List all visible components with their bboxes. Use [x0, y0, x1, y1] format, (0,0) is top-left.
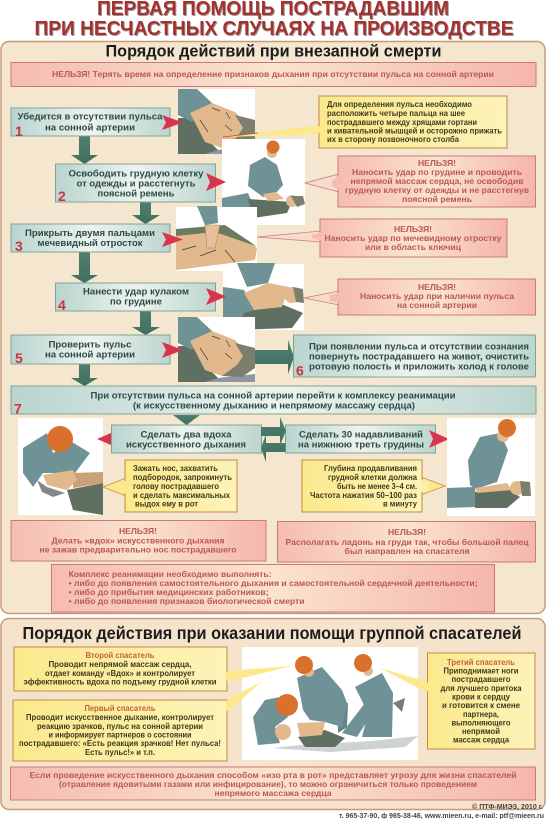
pointer: step 3	[162, 232, 183, 247]
heading: group rescue: Порядок действия при оказании помощи группой спасателей	[22, 623, 522, 643]
callout: second rescuer: эффективность вдоха по подъему грудной клетки	[24, 678, 217, 686]
callout: compression depth	[302, 460, 445, 512]
box: thirty compressions	[286, 425, 436, 453]
callout: breathing technique: выдох ему в рот	[135, 500, 198, 508]
step 6 box: 6	[296, 362, 304, 378]
note: how long to continue resuscitation: • либо до появления самостоятельного дыхания и самостоятельной сердечной деятельности;	[69, 578, 478, 588]
step 1 box	[11, 108, 170, 139]
note: how long to continue resuscitation	[52, 564, 494, 612]
callout: breathing technique: Зажать нос, захватить	[133, 464, 218, 473]
warning callout 4: НЕЛЬЗЯ!	[418, 282, 456, 292]
box: two breaths: искусственного дыхания	[126, 440, 246, 450]
step 1 box: на сонной артерии	[45, 122, 135, 134]
box: two breaths	[112, 425, 262, 453]
note: how long to continue resuscitation: • либо до прибытия медицинских работников;	[69, 587, 269, 597]
illustration: covering the xiphoid	[176, 206, 257, 271]
callout: compression depth: Глубина продавливания	[324, 464, 417, 473]
warning: mouth to mouth danger	[10, 767, 536, 800]
warning: breathing: Делать «вдох» искусственного дыхания	[52, 536, 225, 546]
arrow: step 5 to 7	[71, 364, 98, 386]
callout: third rescuer: выполняющего	[452, 718, 511, 728]
warning: palm position: был направлен на спасателя	[344, 546, 470, 556]
step 3 box: мечевидный отросток	[38, 238, 143, 249]
warning callout 4: на сонной артерии	[397, 300, 477, 310]
pointer: compressions	[429, 430, 449, 448]
callout: first rescuer: реакцию зрачков, пульс на сонной артерии	[37, 722, 203, 731]
pointer: step 1	[162, 115, 183, 130]
box: two breaths: Сделать два вдоха	[140, 430, 232, 440]
callout: first rescuer	[13, 682, 261, 761]
copyright and contacts: © ПТФ-МИЭЗ, 2010 г.	[472, 803, 543, 811]
warning callout 2: непрямой массаж сердца, не освободив	[350, 176, 524, 186]
title: ПРИ НЕСЧАСТНЫХ СЛУЧАЯХ НА ПРОИЗВОДСТВЕ	[34, 18, 514, 40]
warning callout 3: или в область ключиц	[365, 242, 462, 252]
warning banner	[11, 62, 536, 86]
illustration: precordial thump	[223, 263, 304, 330]
box: thirty compressions: Сделать 30 надавливаний	[299, 430, 423, 440]
step 6 box: При появлении пульса и отсутствии сознания	[309, 342, 529, 352]
step 4 box	[56, 283, 216, 313]
callout: third rescuer: пострадавшего	[452, 675, 511, 684]
note: how long to continue resuscitation: Комплекс реанимации необходимо выполнять:	[69, 569, 272, 579]
callout: compression depth: грудной клетки должна	[328, 473, 418, 482]
callout: compression depth: в минуту	[383, 500, 418, 508]
warning callout 2: грудную клетку от одежды и не расстегнув	[345, 185, 529, 195]
step 3 box: Прикрыть двумя пальцами	[25, 228, 155, 239]
warning callout 3	[257, 219, 507, 257]
warning callout 2	[305, 156, 536, 207]
callout: how to find the pulse: пострадавшего между хрящами гортани	[327, 118, 477, 127]
illustration: chest compressions	[447, 418, 535, 516]
step 2 box: 2	[58, 188, 66, 204]
title	[34, 0, 514, 40]
callout: first rescuer: Первый спасатель	[84, 704, 156, 713]
warning: palm position: Располагать ладонь на груди так, чтобы большой палец	[286, 537, 529, 547]
warning callout 2: Наносить удар по грудине и проводить	[352, 167, 522, 177]
step 2 box: поясной ремень	[98, 188, 175, 200]
callout: first rescuer: Есть пульс!» и т.п.	[85, 748, 155, 757]
callout: compression depth: быть не менее 3–4 см.	[337, 482, 417, 491]
illustration: freeing the chest	[222, 139, 305, 225]
pointer: step 4	[206, 288, 226, 305]
warning banner: НЕЛЬЗЯ! Терять время на определение признаков дыхания при отсутствии пульса на сонной артерии	[52, 69, 494, 79]
callout: first rescuer: и информирует партнеров о состоянии	[48, 730, 192, 740]
warning callout 2: поясной ремень	[402, 194, 472, 204]
step 2 box: от одежды и расстегнуть	[76, 178, 196, 190]
step 6 box: ротовую полость и приложить холод к голове	[309, 362, 529, 372]
illustration: rescue breathing	[18, 418, 103, 515]
step 2 box	[56, 164, 216, 204]
step 7 box: (к искусственному дыханию и непрямому массажу сердца)	[133, 400, 415, 412]
callout: third rescuer: Третий спасатель	[447, 658, 515, 667]
step 1 box: Убедится в отсутствии пульса	[18, 112, 163, 122]
warning callout 3: Наносить удар по мечевидному отростку	[324, 233, 502, 243]
callout: breathing technique: голову пострадавшего	[133, 482, 219, 491]
callout: how to find the pulse	[223, 96, 507, 148]
callout: breathing technique	[103, 460, 237, 512]
callout: third rescuer: и готовится к смене	[442, 701, 521, 710]
warning callout 3: НЕЛЬЗЯ!	[394, 224, 432, 234]
callout: how to find the pulse: их в сторону позвоночного столба	[327, 135, 460, 144]
step 4 box: по грудине	[110, 296, 162, 308]
callout: third rescuer	[380, 653, 535, 749]
illustration: rechecking the pulse	[178, 317, 255, 382]
illustration: three rescuers	[242, 647, 418, 760]
step 5 box: на сонной артерии	[45, 350, 135, 360]
callout: third rescuer: для лучшего притока	[440, 684, 522, 693]
pointer: step 2	[206, 173, 226, 191]
warning callout 4	[304, 279, 536, 315]
step 5 box: Проверить пульс	[48, 340, 132, 350]
heading: sudden death: Порядок действий при внезапной смерти	[106, 42, 442, 60]
callout: how to find the pulse: и кивательной мышцей и осторожно прижать	[327, 126, 502, 136]
step 4 box: Нанести удар кулаком	[83, 286, 189, 298]
callout: third rescuer: непрямой	[462, 727, 500, 736]
step 3 box: 3	[15, 238, 23, 254]
step 5 box: 5	[15, 350, 23, 366]
callout: how to find the pulse: расположить четыре пальца на шее	[327, 109, 466, 118]
callout: third rescuer: массаж сердца	[453, 736, 510, 744]
step 7 box	[11, 386, 536, 416]
illustration: checking carotid pulse	[178, 89, 255, 154]
warning callout 4: Наносить удар при наличии пульса	[360, 291, 514, 301]
callout: second rescuer: отдает команду «Вдох» и контролирует	[45, 669, 195, 678]
callout: second rescuer	[14, 647, 292, 691]
arrow: step 7 down	[173, 415, 200, 425]
warning callout 2: НЕЛЬЗЯ!	[418, 158, 456, 168]
warning: mouth to mouth danger: (отравление ядовитыми газами или инфицирование), то можно ограничиться только проведением	[59, 779, 477, 789]
callout: breathing technique: подбородок, запрокинуть	[133, 473, 232, 482]
step 6 box: повернуть пострадавшего на живот, очистить	[309, 352, 529, 362]
pointer: breaths	[97, 430, 118, 448]
panel: group rescue	[1, 618, 545, 810]
step 2 box: Освободить грудную клетку	[68, 168, 204, 180]
warning: palm position: НЕЛЬЗЯ!	[388, 527, 426, 537]
step 7 box: При отсутствии пульса на сонной артерии перейти к комплексу реанимации	[90, 390, 456, 402]
step 7 box: 7	[14, 400, 22, 416]
step 1 box: 1	[15, 123, 23, 139]
callout: breathing technique: и сделать максимальных	[133, 491, 231, 500]
box: thirty compressions: на нижнюю треть грудины	[298, 440, 424, 450]
pointer: step 5	[162, 342, 183, 358]
callout: how to find the pulse: Для определения пульса необходимо	[327, 100, 472, 109]
warning: mouth to mouth danger: Если проведение искусственного дыхания способом «изо рта в рот» представляет угрозу для жизни спасателей	[30, 770, 516, 780]
panel: sudden death procedure	[1, 42, 545, 614]
arrow: step 3 to 4	[71, 252, 98, 283]
callout: compression depth: Частота нажатия 50–100 раз	[310, 491, 417, 500]
step 4 box: 4	[58, 297, 66, 313]
callout: third rescuer: Приподнимает ноги	[444, 666, 519, 676]
step 5 box	[11, 335, 170, 366]
callout: first rescuer: пострадавшего: «Есть реакция зрачков! Нет пульса!	[19, 739, 221, 748]
callout: first rescuer: Проводит искусственное дыхание, контролирует	[26, 713, 214, 722]
step 3 box	[11, 224, 170, 254]
callout: third rescuer: партнера,	[463, 710, 499, 719]
warning: breathing: НЕЛЬЗЯ!	[119, 526, 157, 536]
arrows: alternate breaths and compressions	[261, 417, 286, 462]
copyright and contacts	[339, 803, 544, 819]
warning: mouth to mouth danger: непрямого массажа сердца	[214, 788, 332, 798]
callout: second rescuer: Второй спасатель	[86, 651, 154, 660]
warning: breathing: не зажав предварительно нос пострадавшего	[40, 544, 236, 554]
callout: third rescuer: крови к сердцу	[452, 692, 511, 702]
arrow: step 1 to 2	[71, 136, 98, 164]
arrow: step 4 to 5	[132, 311, 160, 335]
arrow: step 2 to 3	[132, 202, 160, 224]
callout: second rescuer: Проводит непрямой массаж сердца,	[48, 660, 192, 669]
warning: palm position	[278, 522, 536, 562]
step 6 box	[294, 335, 536, 378]
arrow: step 5 to 6	[255, 340, 294, 374]
warning: breathing	[11, 520, 266, 561]
note: how long to continue resuscitation: • либо до появления признаков биологической смерти	[69, 596, 305, 606]
